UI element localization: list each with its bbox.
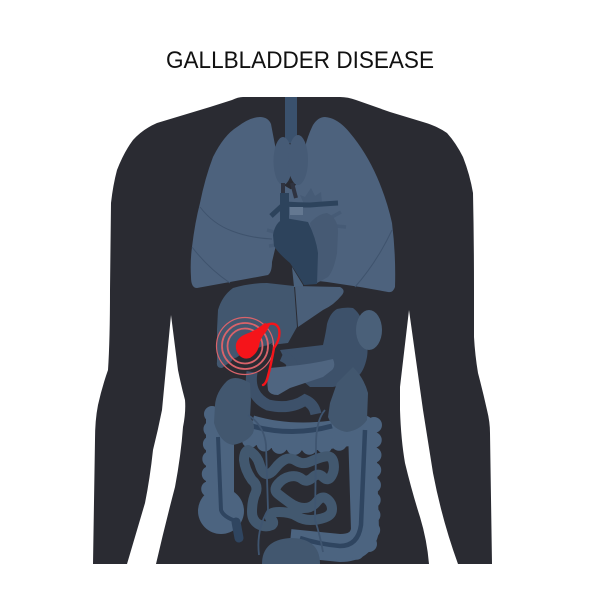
- superior vessel: [280, 193, 289, 221]
- vena cava: [292, 267, 303, 287]
- pain rings: [216, 318, 274, 374]
- trachea: [285, 97, 297, 143]
- left lung: [191, 117, 292, 288]
- colon lumen: [218, 437, 233, 520]
- appendix: [236, 522, 239, 538]
- pancreas: [267, 359, 334, 395]
- spleen: [356, 310, 382, 350]
- liver: [217, 283, 344, 368]
- ventricle: [273, 218, 318, 285]
- title: GALLBLADDER DISEASE: [166, 47, 434, 74]
- lung fissures: [192, 207, 392, 287]
- right liver lobe: [295, 286, 344, 327]
- infographic canvas: [93, 51, 492, 564]
- duodenum: [251, 356, 316, 414]
- right kidney shape: [328, 367, 368, 432]
- colon haustra: [209, 414, 212, 495]
- colon body: [220, 418, 365, 548]
- pulmonary vessels: [300, 188, 322, 204]
- thyroid: [274, 135, 308, 185]
- right lung: [290, 117, 395, 292]
- large intestine: [198, 414, 374, 553]
- left kidney shape: [214, 378, 254, 445]
- gallbladder fossa: [232, 343, 272, 369]
- body silhouette: [93, 97, 492, 564]
- caecum: [198, 488, 244, 534]
- pulmonary stubs: [267, 212, 346, 246]
- aorta: [271, 203, 338, 216]
- bronchi: [283, 183, 296, 198]
- right chamber: [310, 213, 338, 283]
- light patch: [290, 207, 303, 215]
- stomach: [280, 308, 368, 387]
- lungs: [191, 117, 395, 292]
- ureters: [248, 410, 325, 555]
- bile duct: [263, 324, 279, 385]
- heart: [267, 183, 346, 287]
- left liver lobe: [217, 283, 297, 368]
- bladder: [262, 538, 320, 564]
- small intestine: [244, 450, 334, 526]
- gallbladder highlighted in red: [216, 318, 279, 385]
- gallbladder sac: [236, 323, 270, 359]
